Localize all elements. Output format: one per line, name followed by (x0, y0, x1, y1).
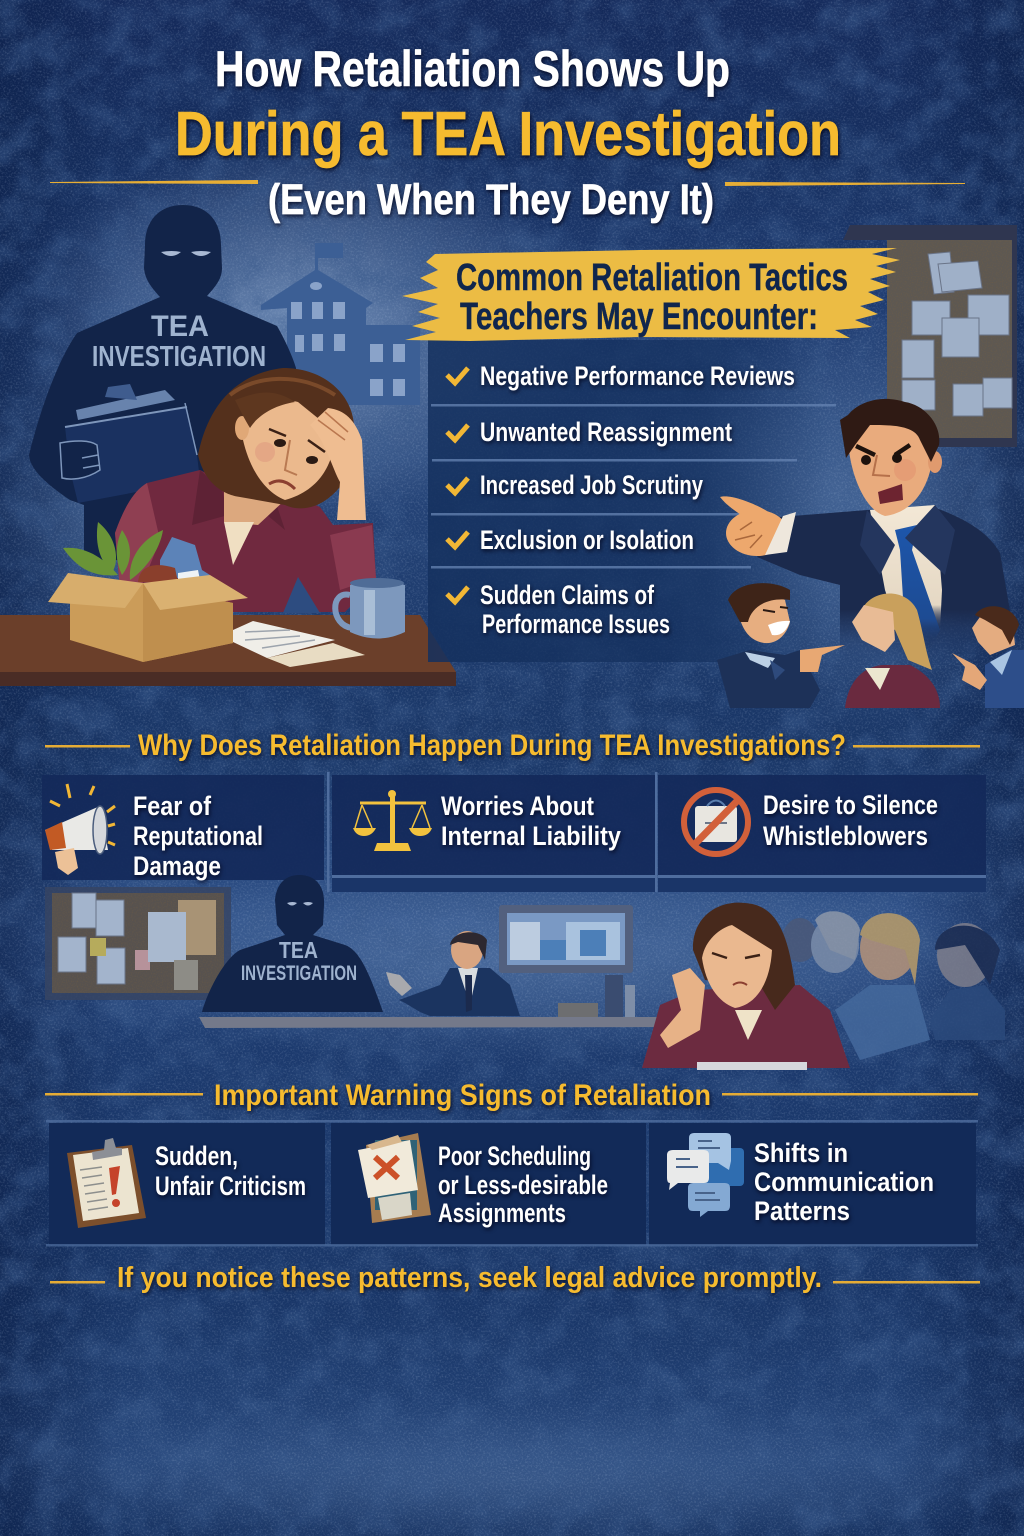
reason 3 text: Desire to Silence (763, 790, 938, 820)
reason 3 text (763, 790, 938, 851)
supervisor face features (856, 445, 910, 455)
shadowy TEA investigator silhouette: INVESTIGATION (92, 341, 266, 373)
warning panels backgrounds (46, 1120, 978, 1246)
warning 1 text: Unfair Criticism (155, 1171, 306, 1201)
supervisor tie (895, 525, 940, 650)
scene monitor (499, 905, 633, 973)
right rule (722, 1093, 978, 1096)
teacher undershirt (224, 522, 254, 565)
teacher neck (224, 490, 285, 525)
supervisor suit (757, 507, 1015, 665)
advice text: If you notice these patterns, seek legal advice promptly. (117, 1262, 822, 1294)
warning 1 text (155, 1141, 306, 1201)
item 5: Sudden Claims of (480, 580, 655, 610)
reason 2 text (441, 791, 621, 851)
warning 2 text: or Less-desirable (438, 1170, 608, 1200)
cardboard box (70, 583, 233, 662)
reason 1 text: Fear of (133, 791, 212, 821)
distressed teacher at desk (0, 368, 456, 686)
banner text: Common Retaliation Tactics (456, 257, 848, 299)
teacher face (243, 401, 335, 500)
supervisor pointing hand (720, 496, 796, 556)
scene pointing man (386, 931, 520, 1016)
coworker laughing and pointing (717, 583, 845, 708)
scene faded colleagues (782, 911, 1005, 1060)
reasons panel backgrounds (42, 772, 986, 892)
corkboard top right (843, 225, 1017, 447)
warning 2 text: Poor Scheduling (438, 1141, 591, 1171)
box contents (160, 537, 210, 578)
item 3: Increased Job Scrutiny (480, 470, 703, 500)
reason 1 text (133, 791, 263, 881)
tactics list panel: Performance Issues (482, 609, 670, 639)
right rule (833, 1281, 980, 1284)
icon: clipboard with exclamation (67, 1138, 146, 1228)
scene silhouette (202, 875, 383, 1012)
coffee mug (350, 580, 405, 638)
scene TEA label: TEA (279, 937, 318, 963)
desk (0, 615, 456, 686)
warning 3 text: Communication (754, 1167, 934, 1197)
scene desk (199, 1017, 667, 1028)
supervisor hair (840, 399, 939, 462)
check 2 (447, 425, 468, 440)
scene silhouette: INVESTIGATION (241, 962, 357, 985)
warning 1 text: Sudden, (155, 1141, 238, 1171)
warning 2 text (438, 1141, 608, 1228)
tactics list panel (428, 340, 836, 662)
check 1 (447, 368, 468, 383)
left rule (45, 1093, 203, 1096)
item 1: Negative Performance Reviews (480, 361, 795, 391)
tactics heading banner (402, 248, 900, 341)
icon: rejected assignment paper (358, 1133, 431, 1223)
scene sad teacher (642, 903, 850, 1070)
left rule (45, 745, 130, 748)
supervisor shirt (870, 505, 942, 630)
teacher hand and forearm (310, 408, 366, 520)
warning 2 text: Assignments (438, 1198, 566, 1228)
check 3 (447, 478, 468, 493)
coworker blonde woman (845, 593, 940, 708)
scene shelf items (558, 975, 635, 1017)
TEA INVESTIGATION label: TEA (151, 310, 209, 343)
school building silhouette (261, 243, 420, 405)
reason 3 text: Whistleblowers (763, 821, 928, 851)
title line 1: How Retaliation Shows Up (215, 41, 730, 97)
tactics heading banner: Teachers May Encounter: (460, 296, 818, 338)
icon: scales of justice (353, 790, 432, 851)
title rules (50, 180, 965, 186)
icon: megaphone (45, 784, 115, 875)
reason 2 text: Internal Liability (441, 821, 621, 851)
coworker right man (952, 606, 1024, 708)
right rule (853, 745, 980, 748)
plant in box (63, 522, 163, 580)
subtitle: (Even When They Deny It) (268, 176, 714, 224)
office scene (45, 875, 1005, 1070)
teacher blouse (115, 470, 376, 612)
reason 1 text: Reputational (133, 821, 263, 851)
heading text: Why Does Retaliation Happen During TEA Investigations? (138, 729, 846, 762)
teacher hair (198, 368, 354, 508)
investigator folder (60, 384, 200, 503)
icon: silenced whistleblower prohibition (684, 790, 748, 854)
item 4: Exclusion or Isolation (480, 525, 694, 555)
shadowy TEA investigator silhouette (29, 205, 296, 560)
scene corkboard (45, 887, 231, 1000)
check 5 (447, 587, 468, 602)
reason 1 text: Damage (133, 851, 221, 881)
icon: speech bubbles (667, 1133, 744, 1217)
warning 3 text: Shifts in (754, 1138, 848, 1168)
title line 2: During a TEA Investigation (175, 100, 841, 169)
warning 3 text (754, 1138, 934, 1226)
supervisor head (848, 412, 933, 516)
reason 2 text: Worries About (441, 791, 594, 821)
angry pointing supervisor (720, 399, 1015, 665)
item 2: Unwanted Reassignment (480, 417, 732, 447)
heading text: Important Warning Signs of Retaliation (214, 1079, 711, 1112)
title (50, 41, 965, 224)
desk papers (267, 643, 365, 667)
check 4 (447, 532, 468, 547)
investigator eyes (161, 251, 211, 256)
warning 3 text: Patterns (754, 1196, 850, 1226)
left rule (50, 1281, 105, 1284)
